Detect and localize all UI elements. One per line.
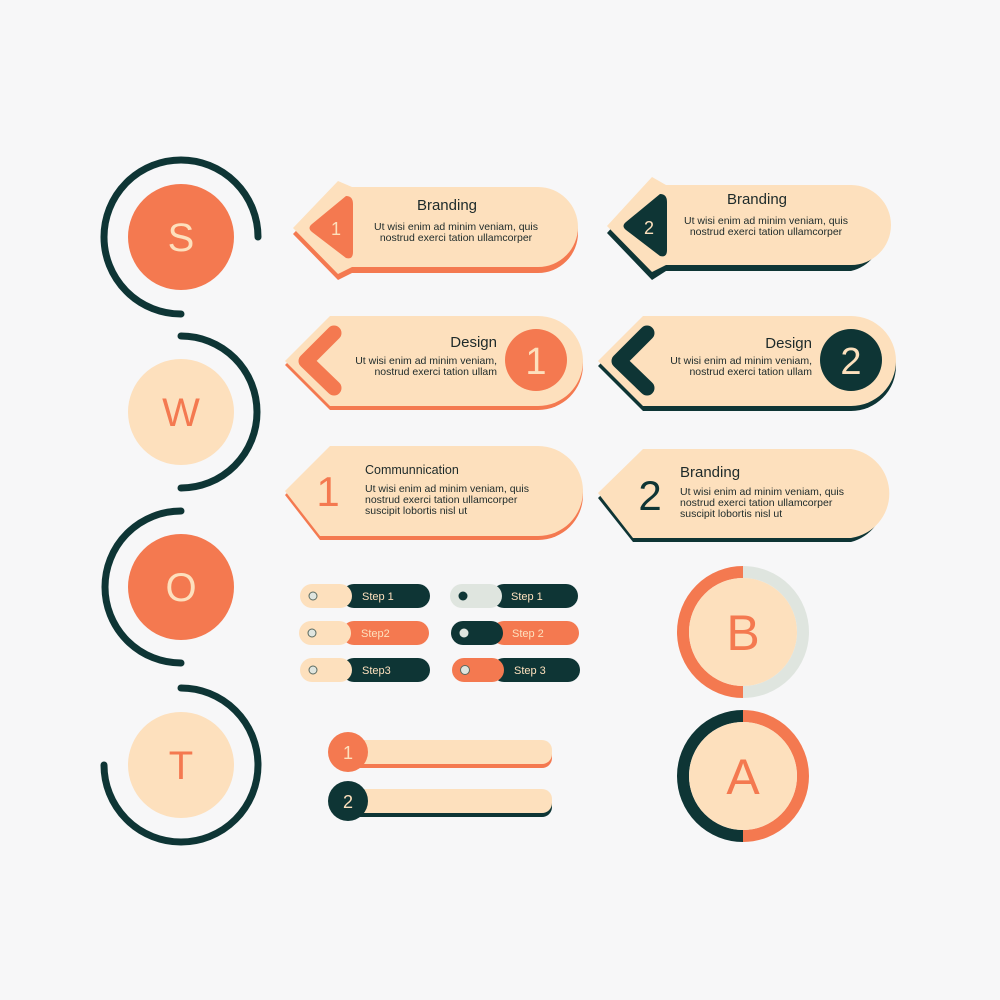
text: Branding 2: nostrud exerci tation ullamcorper xyxy=(690,226,843,238)
text: Communication: suscipit lobortis nisl ut xyxy=(365,505,467,517)
icon: chevron xyxy=(306,333,334,388)
text: Branding 1: Branding xyxy=(417,197,477,214)
card: Communication 1: 1 xyxy=(316,468,340,515)
W circle xyxy=(128,336,257,488)
text: Branding 1: Ut wisi enim ad minim veniam, quis xyxy=(374,221,538,233)
text: Branding 1: nostrud exerci tation ullamcorper xyxy=(380,232,533,244)
card: Design 2 xyxy=(598,316,896,411)
O circle: O xyxy=(165,566,197,610)
icon: triangle 2 xyxy=(624,194,667,256)
icon: chevron dark xyxy=(619,333,647,388)
card: Design 1 xyxy=(285,316,583,410)
toggle step 3: Step3 xyxy=(362,665,391,677)
progress bar 2 xyxy=(328,781,552,821)
text: Design 1: Design xyxy=(450,334,497,351)
text: Communication xyxy=(365,463,529,517)
text: Branding 3: suscipit lobortis nisl ut xyxy=(680,508,782,520)
text: Branding 3: nostrud exerci tation ullamcorper xyxy=(680,497,833,509)
icon: triangle 1: 1 xyxy=(331,219,341,239)
ring A: A xyxy=(726,749,760,805)
text: Branding 3: Ut wisi enim ad minim veniam, quis xyxy=(680,486,844,498)
text: Communication: Communnication xyxy=(365,463,459,477)
O circle xyxy=(105,511,234,663)
text: Branding 3 xyxy=(680,464,844,520)
toggle step 2: Step2 xyxy=(361,628,390,640)
text: Branding 1 xyxy=(374,197,538,244)
card: Communication 1 xyxy=(285,446,583,540)
card: Branding 3: 2 xyxy=(638,472,662,519)
text: Design 2 xyxy=(670,335,812,378)
ring A xyxy=(683,716,803,836)
text: Branding 2: Ut wisi enim ad minim veniam, quis xyxy=(684,215,848,227)
badge 2: 2 xyxy=(840,341,862,383)
card: Branding 2 xyxy=(607,177,891,280)
text: Communication: nostrud exerci tation ullamcorper xyxy=(365,494,518,506)
badge 1 xyxy=(505,329,567,391)
S circle: S xyxy=(168,216,194,260)
text: Communication: Ut wisi enim ad minim veniam, quis xyxy=(365,483,529,495)
W circle: W xyxy=(162,391,200,435)
text: Design 1: Ut wisi enim ad minim veniam, xyxy=(355,355,497,367)
badge 2 xyxy=(820,329,882,391)
text: Branding 3: Branding xyxy=(680,464,740,481)
card: Branding 1 xyxy=(293,181,578,280)
icon: triangle 2: 2 xyxy=(644,218,654,238)
toggle step 3: Step 3 xyxy=(514,665,546,677)
panel: toggles left xyxy=(299,584,430,682)
progress bar 2: 2 xyxy=(343,792,353,812)
text: Design 1 xyxy=(355,334,497,378)
text: Design 2: nostrud exerci tation ullam xyxy=(689,366,812,378)
text: Branding 2 xyxy=(684,191,848,238)
T circle xyxy=(104,688,258,842)
panel: SWOT column xyxy=(104,160,258,842)
panel: toggles right xyxy=(450,584,580,682)
progress bar 1 xyxy=(328,732,552,772)
card: Branding 3 xyxy=(598,449,889,542)
toggle step 1: Step 1 xyxy=(511,591,543,603)
icon: triangle 1 xyxy=(310,196,353,258)
T circle: T xyxy=(169,744,193,788)
text: Design 1: nostrud exerci tation ullam xyxy=(374,366,497,378)
ring B xyxy=(683,572,803,692)
badge 1: 1 xyxy=(525,341,547,383)
toggle step 2: Step 2 xyxy=(512,628,544,640)
ring B: B xyxy=(726,605,760,661)
text: Branding 2: Branding xyxy=(727,191,787,208)
text: Design 2: Design xyxy=(765,335,812,352)
progress bar 1: 1 xyxy=(343,743,353,763)
text: Design 2: Ut wisi enim ad minim veniam, xyxy=(670,355,812,367)
toggle step 1: Step 1 xyxy=(362,591,394,603)
S circle xyxy=(104,160,258,314)
